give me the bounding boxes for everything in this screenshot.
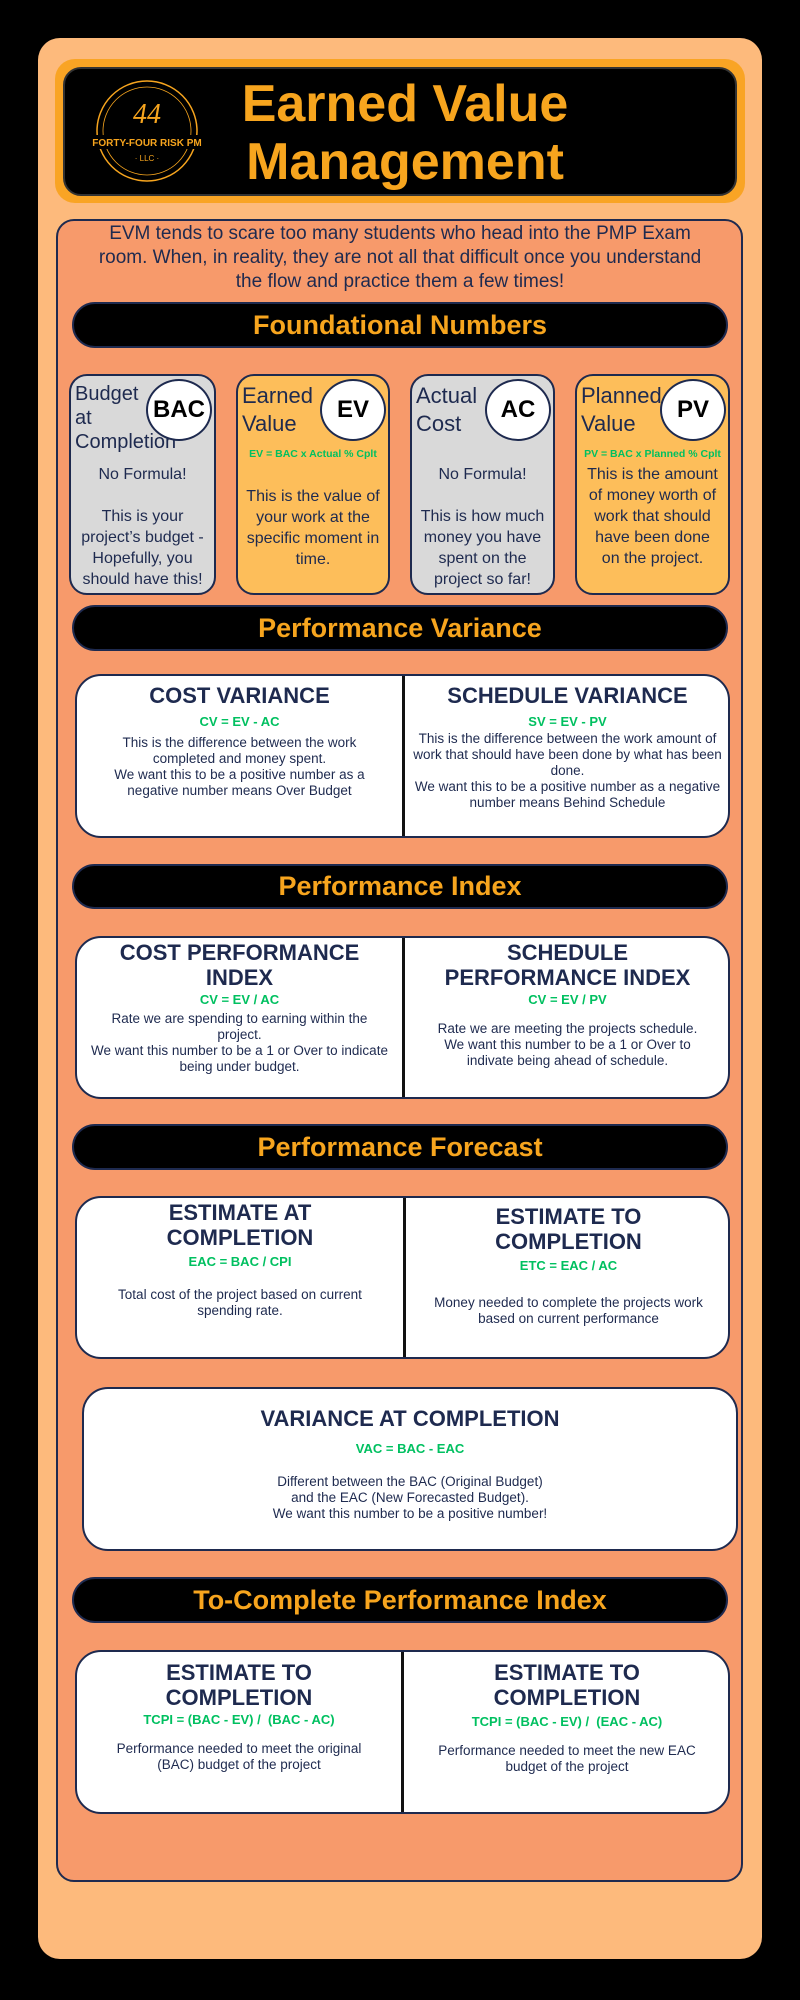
card: EV: Value (242, 411, 297, 436)
card: BAC (69, 374, 216, 595)
CPI: We want this number to be a 1 or Over to indicate being under budget. (91, 1043, 388, 1074)
header (55, 59, 745, 203)
EAC: Total cost of the project based on current spending rate. (118, 1287, 362, 1318)
card: PV: PV = BAC x Planned % Cplt (584, 448, 721, 460)
TCPI BAC: ESTIMATE TO COMPLETION (166, 1660, 312, 1710)
panel: VAC: VARIANCE AT COMPLETION (260, 1406, 560, 1431)
cost variance: We want this to be a positive number as a negative number means Over Budget (114, 767, 365, 798)
SPI (438, 940, 697, 1068)
TCPI BAC (117, 1660, 361, 1772)
SPI: CV = EV / PV (528, 992, 607, 1007)
heading: TCPI (72, 1577, 728, 1623)
title (242, 75, 568, 191)
card: AC (410, 374, 555, 595)
panel: VAC: We want this number to be a positive number! (273, 1506, 547, 1521)
card: AC: Cost (416, 411, 461, 436)
SPI: Rate we are meeting the projects schedule. (438, 1021, 697, 1036)
ETC: Money needed to complete the projects work based on current performance (434, 1295, 703, 1326)
heading: Performance Index (72, 864, 728, 909)
card: EV: Earned (242, 383, 313, 408)
ETC (434, 1204, 703, 1326)
card: AC: This is how much money you have spent on the project so far! (421, 508, 544, 588)
card: PV: PV (677, 396, 709, 423)
cost variance (114, 683, 365, 798)
EAC: EAC = BAC / CPI (189, 1254, 291, 1269)
card: BAC: No Formula! (98, 466, 187, 483)
heading: Performance Variance: Performance Variance (258, 612, 542, 642)
ETC: ETC = EAC / AC (520, 1258, 617, 1273)
TCPI EAC: Performance needed to meet the new EAC budget of the project (438, 1743, 696, 1774)
TCPI BAC: TCPI = (BAC - EV) / (BAC - AC) (143, 1712, 335, 1727)
CPI: COST PERFORMANCE INDEX (120, 940, 359, 990)
card: PV: This is the amount of money worth of work that should have been done on the project. (587, 466, 718, 567)
panel: VAC: and the EAC (New Forecasted Budget). (291, 1490, 529, 1505)
TCPI EAC: ESTIMATE TO COMPLETION (494, 1660, 640, 1710)
heading: Performance Forecast (72, 1124, 728, 1170)
panel: variance (75, 674, 730, 838)
card: EV: This is the value of your work at the specific moment in time. (246, 488, 380, 568)
EAC: ESTIMATE AT COMPLETION (167, 1200, 313, 1250)
schedule variance: We want this to be a positive number as a negative number means Behind Schedule (415, 779, 720, 810)
icon: logo: · LLC · (135, 154, 159, 163)
card: BAC: Completion (75, 431, 176, 453)
card: BAC: BAC (153, 396, 205, 423)
card: EV: EV (337, 396, 369, 423)
icon: logo: FORTY-FOUR RISK PM (92, 138, 202, 149)
cost variance: COST VARIANCE (149, 683, 330, 708)
title: Earned Value (242, 75, 568, 133)
panel: VAC: VAC = BAC - EAC (356, 1441, 464, 1456)
icon: logo (92, 80, 202, 182)
card: EV (236, 374, 390, 595)
card: BAC: at (75, 407, 92, 429)
schedule variance: SV = EV - PV (528, 714, 607, 729)
EAC (118, 1200, 362, 1318)
heading: TCPI: To-Complete Performance Index (193, 1584, 607, 1614)
TCPI BAC: Performance needed to meet the original (BAC) budget of the project (117, 1741, 361, 1772)
panel: index (75, 936, 730, 1099)
cost variance: This is the difference between the work completed and money spent. (123, 735, 356, 766)
heading: Foundational Numbers: Foundational Numbers (253, 310, 547, 340)
card: AC: No Formula! (438, 466, 527, 483)
panel: TCPI (75, 1650, 730, 1814)
card: EV: EV = BAC x Actual % Cplt (249, 448, 377, 460)
SPI: We want this number to be a 1 or Over to indivate being ahead of schedule. (444, 1037, 691, 1068)
ETC: ESTIMATE TO COMPLETION (495, 1204, 642, 1254)
schedule variance (413, 683, 722, 810)
CPI: CV = EV / AC (200, 992, 279, 1007)
heading: Performance Forecast: Performance Forecast (257, 1132, 543, 1162)
cost variance: CV = EV - AC (199, 714, 280, 729)
title: Management (246, 133, 564, 191)
card: AC: Actual (416, 383, 477, 408)
heading: Foundational Numbers (72, 302, 728, 348)
TCPI EAC (438, 1660, 696, 1774)
schedule variance: This is the difference between the work amount of work that should have been done by what has been done. (413, 731, 722, 778)
heading: Performance Variance (72, 605, 728, 651)
TCPI EAC: TCPI = (BAC - EV) / (EAC - AC) (472, 1714, 662, 1729)
panel: forecast (75, 1196, 730, 1359)
intro text: EVM tends to scare too many students who head into the PMP Exam room. When, in reality, they are not all that difficult once you understand the flow and practice them a few times! (99, 223, 701, 292)
card: PV (575, 374, 730, 595)
CPI: Rate we are spending to earning within the project. (112, 1011, 367, 1042)
icon: logo: 44 (133, 99, 161, 130)
card: PV: Value (581, 411, 636, 436)
card: PV: Planned (581, 383, 662, 408)
panel: VAC: Different between the BAC (Original Budget) (277, 1474, 543, 1489)
card: BAC: This is your project’s budget - Hopefully, you should have this! (81, 508, 204, 588)
main panel (56, 219, 743, 1882)
card: AC: AC (501, 396, 535, 423)
SPI: SCHEDULE PERFORMANCE INDEX (445, 940, 690, 990)
CPI (91, 940, 388, 1074)
schedule variance: SCHEDULE VARIANCE (447, 683, 688, 708)
heading: Performance Index: Performance Index (278, 871, 522, 901)
card: BAC: Budget (75, 383, 138, 405)
panel: VAC (82, 1387, 738, 1551)
